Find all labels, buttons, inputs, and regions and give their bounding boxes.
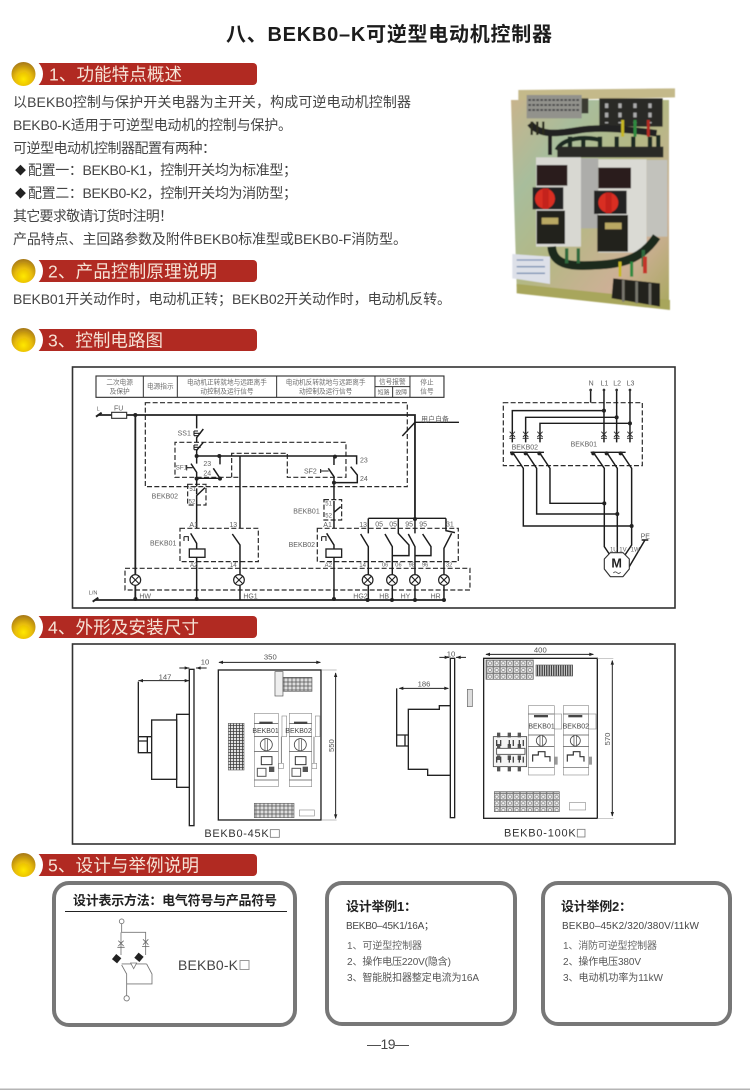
section heading 2 [11,255,257,287]
panel: design notation [54,883,295,1025]
main power circuit: 1U [610,547,618,553]
control circuit left [89,376,470,602]
circuit labels: 95 [419,521,427,528]
dashed enclosures [125,403,470,590]
circuit labels: A2 [325,563,333,569]
circuit labels: HB [379,593,389,600]
circuit labels: A2 [190,563,198,569]
main power circuit: L2 [613,381,621,388]
circuit labels: HW [139,593,151,600]
header table: 短路 [378,389,390,397]
section heading 1: 1、功能特点概述 [49,64,182,84]
motor [604,553,629,577]
circuit labels: 52 [325,514,333,520]
drawing: BEKB0-100K: 186 [418,680,430,689]
panel: design example 2: 3、电动机功率为11kW [563,971,664,984]
panel: outline and mounting dimensions [72,644,675,844]
circuit labels: 23 [360,458,368,465]
section heading 3 [11,324,257,356]
circuit labels: A1 [323,522,332,529]
panel: design example 1: 设计举例1： [346,899,417,914]
circuit labels: 14 [230,563,237,569]
panel: design example 2 [543,883,730,1024]
title: 八、BEKB0–K可逆型电动机控制器 [226,22,552,46]
circuit labels: 24 [203,470,211,477]
drawing: BEKB0-100K: 570 [603,733,612,745]
drawing: BEKB0-100K: 10 [447,650,455,659]
drawing: BEKB0-100K: BEKB0-100K [504,828,576,840]
text block: function overview: BEKB0-K适用于可逆型电动机的控制与保护。 [13,117,292,133]
main power circuit: N [589,381,594,388]
header table: 故障 [395,389,407,397]
drawing: BEKB0-45K: BEKB0-45K [204,828,269,840]
wiring [95,412,445,600]
header table: 信号 [420,387,434,396]
header table: 信号报警 [379,377,406,386]
header table: 动控制及运行信号 [200,387,254,396]
header table: 停止 [420,377,434,386]
panel: design example 2: 2、操作电压380V [563,955,641,968]
control circuit right wiring [361,422,459,600]
drawing: BEKB0-45K [138,652,337,840]
section heading 3: 3、控制电路图 [48,330,163,350]
header table [96,376,444,397]
section heading 2: 2、产品控制原理说明 [48,262,217,282]
circuit labels: 51 [325,502,333,508]
panel: control circuit diagram [72,367,675,608]
circuit labels: 23 [203,461,211,468]
circuit labels [89,406,454,600]
text block: function overview: 配置一：BEKB0-K1，控制开关均为标准型； [28,162,297,179]
drawing: BEKB0-45K: BEKB02 [285,728,312,735]
circuit labels: 06 [395,562,402,568]
circuit labels: SF2 [304,468,317,475]
header table: 动控制及运行信号 [299,387,353,396]
panel: design example 1 [327,883,515,1024]
main power circuit: PE [641,534,650,541]
panel: design notation: 设计表示方法：电气符号与产品符号 [73,893,277,908]
section heading 5 [11,849,257,881]
motor: M [611,557,622,571]
circuit labels: BEKB01 [150,541,177,548]
icon: electrical symbol [112,919,152,1001]
panel: design example 2: BEKB0–45K2/320/380V/11kW [562,921,700,932]
drawing: BEKB0-45K: 10 [201,658,209,667]
main power circuit: 1W [631,547,640,553]
main power circuit: L1 [601,381,609,388]
text block: function overview [13,94,411,247]
drawing: BEKB0-100K: BEKB02 [563,723,589,730]
header table: 二次电源 [106,377,133,386]
panel: design example 2: 设计举例2： [561,899,632,914]
text block: function overview: 产品特点、主回路参数及附件BEKB0标准型或BEKB0-F消防型。 [13,231,407,247]
drawing: BEKB0-100K [397,646,614,840]
circuit labels: 14 [359,563,367,569]
circuit labels: L [97,407,100,413]
circuit labels: 96 [422,562,428,568]
panel: design example 1: 2、操作电压220V(隐含) [347,955,451,968]
circuit labels: 13 [229,522,237,529]
header table: 及保护 [110,387,130,396]
text block: function overview: 可逆型电动机控制器配置有两种： [13,140,216,156]
main power circuit: L3 [627,381,635,388]
text block: function overview: 配置二：BEKB0-K2，控制开关均为消防型； [28,185,297,202]
circuit labels: HG1 [243,593,258,600]
text block: function overview: 以BEKB0控制与保护开关电器为主开关，构成可逆电动机控制器 [13,94,411,110]
circuit labels: 05 [375,521,383,528]
main power circuit [421,381,650,577]
drawing: BEKB0-45K: BEKB01 [252,728,279,735]
page number: —19— [367,1036,409,1052]
product photo [511,88,675,310]
panel: design notation: BEKB0-K [178,957,239,973]
circuit labels: HG2 [353,593,368,600]
header table: 电动机反转就地与远距离手 [286,377,366,386]
text block: function overview: ◆ [15,187,26,200]
text block: function overview: 其它要求敬请订货时注明！ [13,208,173,224]
bottom rule [0,1088,750,1090]
section heading 1 [11,58,257,90]
drawing: BEKB0-45K: 550 [327,739,336,752]
circuit labels: BEKB02 [152,494,178,501]
main power circuit: 1V [619,547,627,553]
circuit labels: HY [401,593,411,600]
circuit labels: 51 [189,487,197,493]
lamps and nodes [93,413,449,602]
circuit labels: 32 [446,562,452,568]
circuit labels: 95 [405,521,413,528]
circuit labels: 13 [359,522,367,529]
drawing: BEKB0-45K: 147 [159,672,171,681]
panel: design example 2: 1、消防可逆型控制器 [563,939,657,952]
circuit labels: BEKB02 [289,542,315,549]
circuit labels: A1 [189,522,198,529]
text block: control principle: BEKB01开关动作时，电动机正转；BEKB02开关动作时，电动机反转。 [13,291,451,308]
header table: 电动机正转就地与远距离手 [187,377,267,386]
drawing: BEKB0-100K: 400 [534,646,547,655]
main power circuit: 用户自备 [421,415,449,424]
circuit labels: L/N [89,591,97,597]
drawing: BEKB0-100K: BEKB01 [528,723,555,730]
panel: design example 1: 1、可逆型控制器 [347,939,422,952]
header table: 电源指示 [147,382,174,391]
circuit labels: 24 [360,476,368,483]
panel: design example 1: 3、智能脱扣器整定电流为16A [347,971,479,984]
circuit labels: 31 [446,521,454,528]
text block: function overview: ◆ [15,164,26,177]
circuit labels: BEKB01 [293,508,320,515]
drawing: BEKB0-45K: 350 [264,652,277,661]
circuit labels: 06 [382,562,388,568]
circuit labels: 98 [409,562,415,568]
circuit labels: HR [431,593,441,600]
circuit labels: FU [114,406,123,413]
section heading 5: 5、设计与举例说明 [48,856,199,876]
section heading 4: 4、外形及安装尺寸 [48,618,199,638]
main power circuit: BEKB02 [512,445,538,452]
circuit labels: SF1 [176,464,188,471]
circuit labels: 05 [389,521,397,528]
section heading 4 [11,611,257,643]
circuit labels: 52 [189,500,196,506]
panel: design example 1: BEKB0–45K1/16A； [346,921,434,932]
main power circuit: BEKB01 [571,442,597,449]
circuit labels: SS1 [178,430,191,437]
